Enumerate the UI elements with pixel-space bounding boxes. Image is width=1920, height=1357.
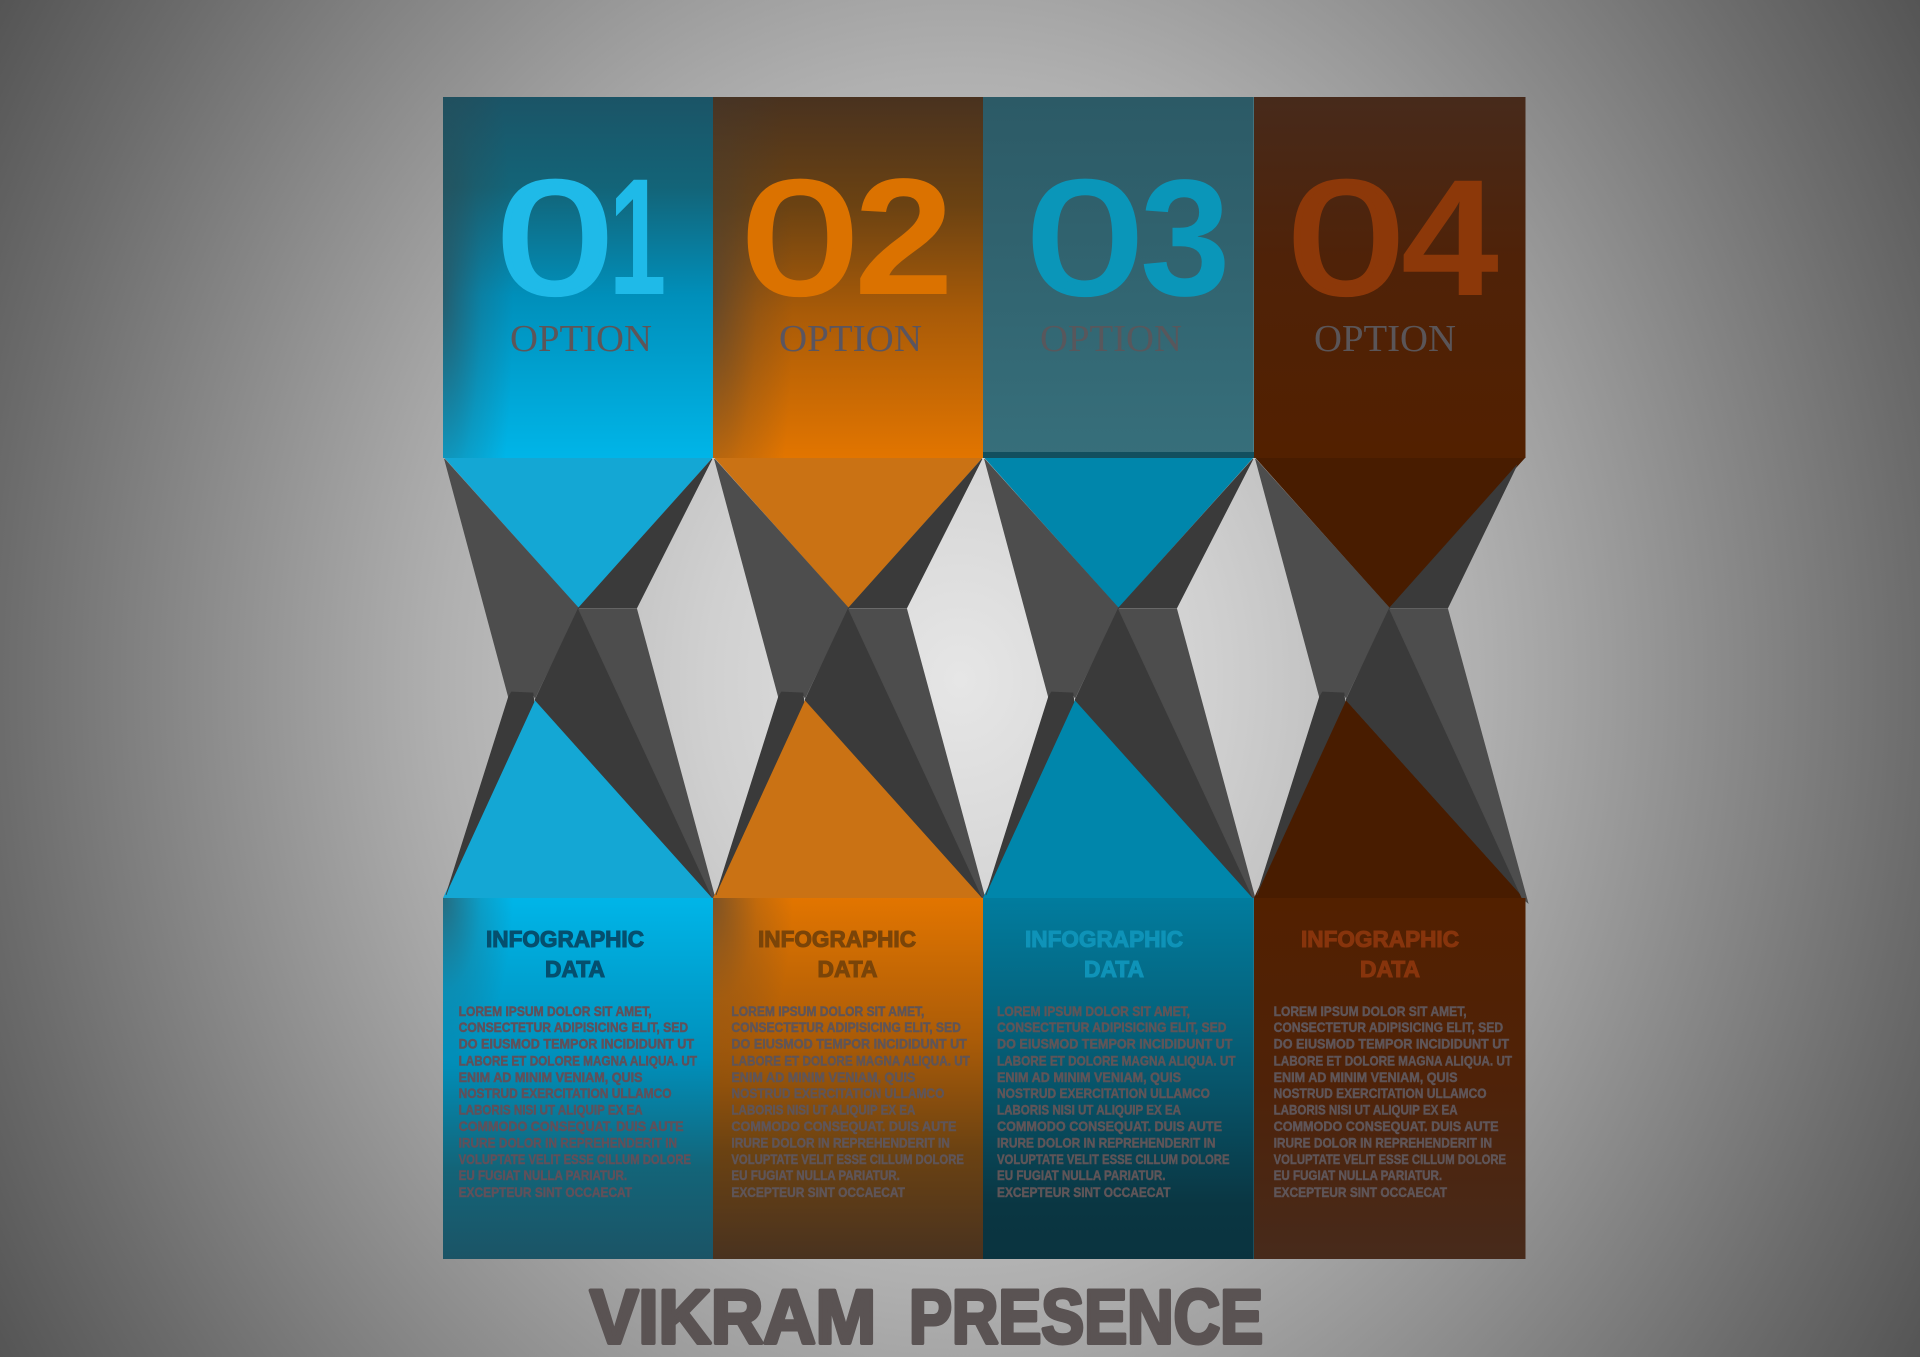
body text: EU FUGIAT NULLA PARIATUR. (731, 1167, 900, 1183)
body text: LABORIS NISI UT ALIQUIP EX EA (731, 1102, 915, 1118)
fold: column 1 (443, 458, 715, 898)
body text (459, 1003, 697, 1200)
body text (731, 1003, 970, 1200)
panel: column 1 text (443, 898, 713, 1259)
heading: INFOGRAPHIC (1301, 926, 1459, 952)
body text: COMMODO CONSEQUAT. DUIS AUTE (731, 1118, 956, 1134)
option label: OPTION (779, 318, 922, 360)
body text: LABORE ET DOLORE MAGNA ALIQUA. UT (731, 1052, 970, 1068)
body text: NOSTRUD EXERCITATION ULLAMCO (731, 1085, 944, 1101)
heading: DATA (1084, 956, 1144, 982)
panel: option 04 header (1254, 97, 1526, 458)
fold: column 3 (983, 458, 1255, 898)
body text: EU FUGIAT NULLA PARIATUR. (459, 1167, 627, 1183)
body text: CONSECTETUR ADIPISICING ELIT, SED (459, 1019, 688, 1035)
panel: column 2 text (713, 898, 983, 1259)
heading: DATA (545, 956, 605, 982)
number 01: 0 (498, 148, 612, 327)
body text: CONSECTETUR ADIPISICING ELIT, SED (1274, 1019, 1503, 1035)
panel: column 4 text (1254, 898, 1526, 1259)
body text: DO EIUSMOD TEMPOR INCIDIDUNT UT (459, 1036, 694, 1052)
heading (1025, 926, 1183, 982)
body text: LABORIS NISI UT ALIQUIP EX EA (1274, 1102, 1458, 1118)
body text: LOREM IPSUM DOLOR SIT AMET, (731, 1003, 924, 1019)
body text: LABORE ET DOLORE MAGNA ALIQUA. UT (459, 1052, 697, 1068)
body text: LOREM IPSUM DOLOR SIT AMET, (459, 1003, 652, 1019)
body text: LABORIS NISI UT ALIQUIP EX EA (997, 1102, 1181, 1118)
footer title (590, 1275, 1263, 1357)
heading: DATA (818, 956, 878, 982)
body text: DO EIUSMOD TEMPOR INCIDIDUNT UT (997, 1036, 1233, 1052)
body text: VOLUPTATE VELIT ESSE CILLUM DOLORE (459, 1151, 691, 1167)
body text: NOSTRUD EXERCITATION ULLAMCO (997, 1085, 1210, 1101)
body text: ENIM AD MINIM VENIAM, QUIS (1274, 1069, 1458, 1085)
body text: IRURE DOLOR IN REPREHENDERIT IN (1274, 1134, 1492, 1150)
body text: EXCEPTEUR SINT OCCAECAT (1274, 1184, 1447, 1200)
fold: column 4 (1254, 458, 1528, 903)
body text: IRURE DOLOR IN REPREHENDERIT IN (459, 1134, 677, 1150)
body text: VOLUPTATE VELIT ESSE CILLUM DOLORE (997, 1151, 1230, 1167)
fold: column 2 (713, 458, 985, 898)
body text: COMMODO CONSEQUAT. DUIS AUTE (459, 1118, 684, 1134)
heading: INFOGRAPHIC (1025, 926, 1183, 952)
number 04 (1289, 146, 1499, 331)
number 01 (498, 145, 666, 330)
body text: EXCEPTEUR SINT OCCAECAT (997, 1184, 1171, 1200)
body text: ENIM AD MINIM VENIAM, QUIS (459, 1069, 643, 1085)
heading: INFOGRAPHIC (758, 926, 916, 952)
heading: DATA (1360, 956, 1420, 982)
option label: OPTION (1040, 318, 1182, 360)
body text: NOSTRUD EXERCITATION ULLAMCO (459, 1085, 672, 1101)
panel: option 02 header (713, 97, 983, 458)
body text: LABORE ET DOLORE MAGNA ALIQUA. UT (1274, 1052, 1512, 1068)
body text: ENIM AD MINIM VENIAM, QUIS (997, 1069, 1181, 1085)
body text: DO EIUSMOD TEMPOR INCIDIDUNT UT (731, 1036, 967, 1052)
heading (1301, 926, 1459, 982)
number 04: 4 (1401, 146, 1499, 331)
body text: EXCEPTEUR SINT OCCAECAT (731, 1184, 905, 1200)
heading: INFOGRAPHIC (486, 926, 644, 952)
number 02: 2 (854, 144, 954, 330)
body text: VOLUPTATE VELIT ESSE CILLUM DOLORE (731, 1151, 964, 1167)
body text: VOLUPTATE VELIT ESSE CILLUM DOLORE (1274, 1151, 1506, 1167)
body text: EU FUGIAT NULLA PARIATUR. (997, 1167, 1166, 1183)
body text: COMMODO CONSEQUAT. DUIS AUTE (1274, 1118, 1499, 1134)
body text: LABORIS NISI UT ALIQUIP EX EA (459, 1102, 643, 1118)
number 04: 0 (1289, 148, 1403, 327)
heading (758, 926, 916, 982)
body text: ENIM AD MINIM VENIAM, QUIS (731, 1069, 915, 1085)
body text: NOSTRUD EXERCITATION ULLAMCO (1274, 1085, 1487, 1101)
option label: OPTION (510, 318, 652, 360)
body text: LOREM IPSUM DOLOR SIT AMET, (1274, 1003, 1467, 1019)
number 03: 0 (1028, 148, 1142, 327)
body text: EXCEPTEUR SINT OCCAECAT (459, 1184, 632, 1200)
panel: option 01 header (443, 97, 713, 458)
body text: CONSECTETUR ADIPISICING ELIT, SED (997, 1019, 1226, 1035)
panel: column 3 text (983, 898, 1254, 1259)
number 01: 1 (609, 145, 666, 330)
number 02 (743, 144, 954, 330)
body text (1274, 1003, 1512, 1200)
panel: option 03 header (983, 97, 1254, 458)
heading (486, 926, 644, 982)
body text: EU FUGIAT NULLA PARIATUR. (1274, 1167, 1442, 1183)
body text: CONSECTETUR ADIPISICING ELIT, SED (731, 1019, 961, 1035)
number 03: 3 (1140, 145, 1230, 330)
body text: IRURE DOLOR IN REPREHENDERIT IN (731, 1134, 950, 1150)
body text: LABORE ET DOLORE MAGNA ALIQUA. UT (997, 1052, 1236, 1068)
body text: IRURE DOLOR IN REPREHENDERIT IN (997, 1134, 1216, 1150)
number 03 (1028, 145, 1230, 330)
body text (997, 1003, 1236, 1200)
body text: COMMODO CONSEQUAT. DUIS AUTE (997, 1118, 1222, 1134)
option label: OPTION (1314, 318, 1456, 360)
body text: LOREM IPSUM DOLOR SIT AMET, (997, 1003, 1190, 1019)
body text: DO EIUSMOD TEMPOR INCIDIDUNT UT (1274, 1036, 1509, 1052)
number 02: 0 (743, 148, 857, 327)
